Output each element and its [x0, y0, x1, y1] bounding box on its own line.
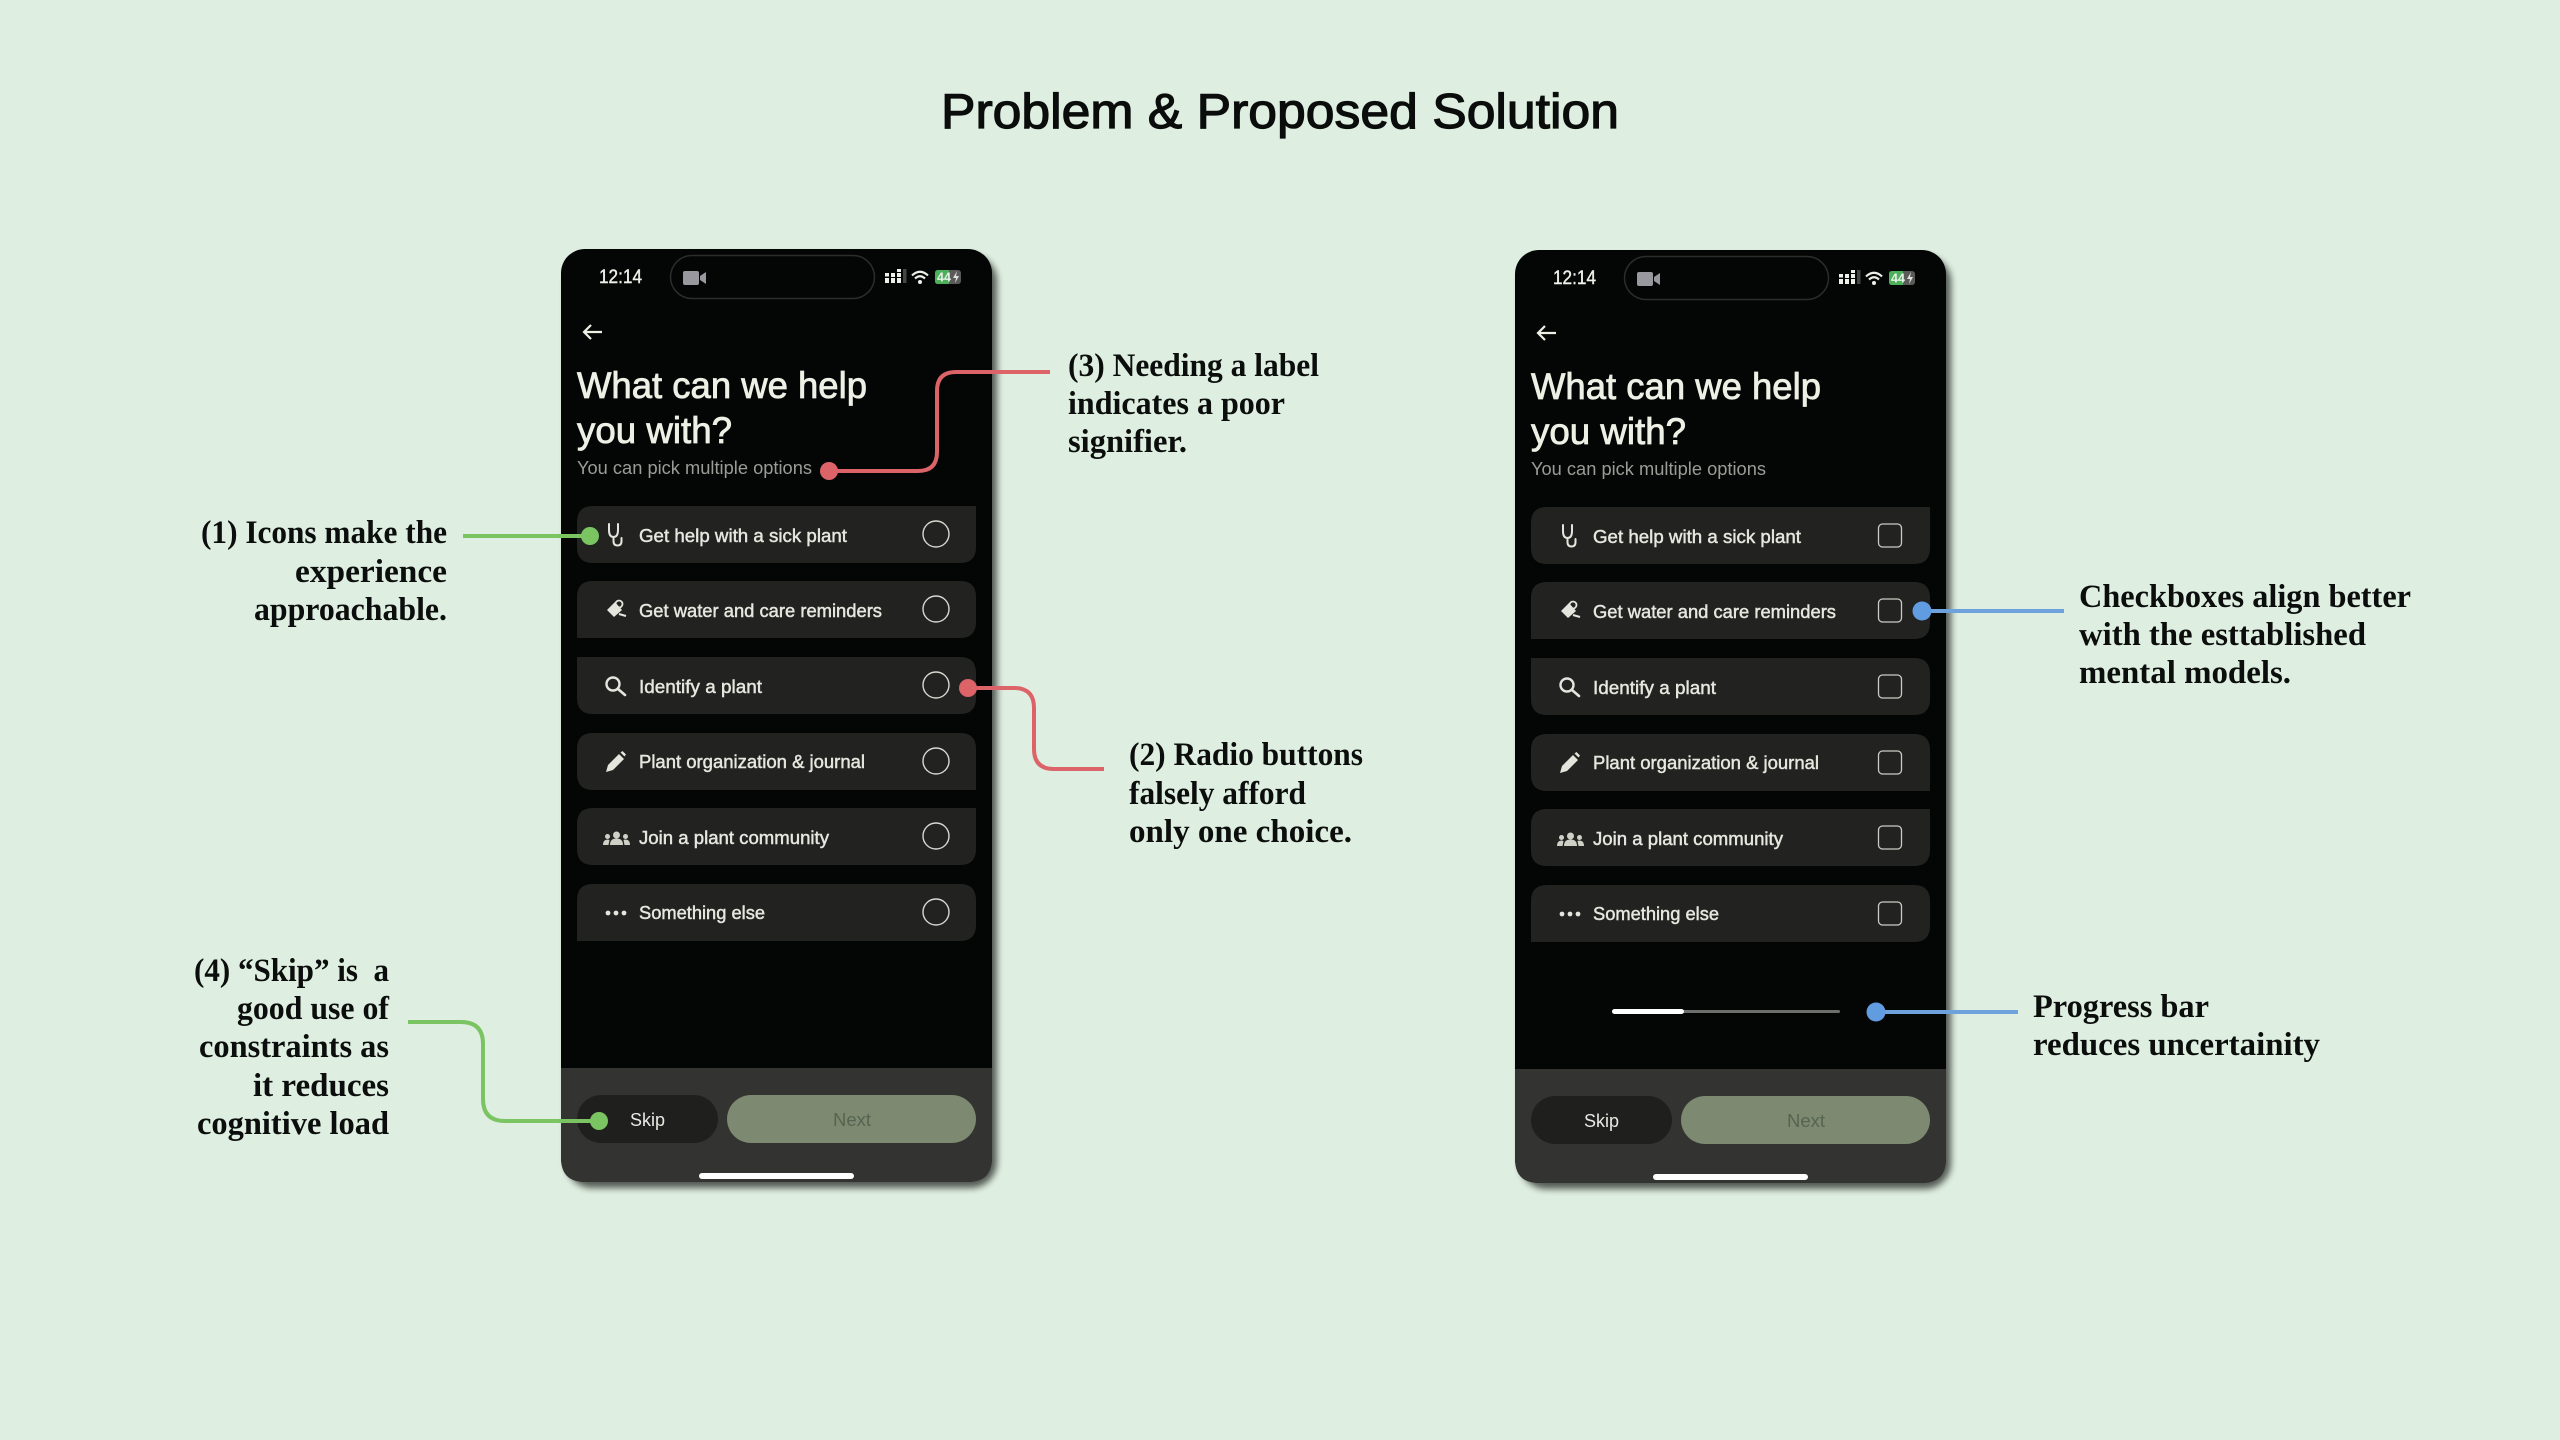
callout: progress bar: Progress bar — [2033, 989, 2209, 1025]
option: identify: Identify a plant — [1593, 678, 1716, 698]
heading — [1531, 366, 1821, 452]
heading — [577, 365, 867, 451]
option: sick plant — [577, 506, 976, 563]
connector: icons callout — [463, 527, 599, 545]
option: water reminders: Get water and care reminders — [639, 601, 882, 621]
footer area — [1515, 1069, 1946, 1183]
subheading: You can pick multiple options — [1531, 459, 1766, 479]
phone: proposed screen with checkboxes — [1515, 250, 1951, 1189]
heading: What can we help — [1531, 366, 1821, 407]
callout: radio buttons — [1129, 737, 1363, 850]
icon: people — [1557, 832, 1584, 846]
icon: pencil — [606, 751, 626, 772]
skip button — [1531, 1096, 1672, 1144]
status bar: 12:14 — [599, 267, 642, 288]
callout: skip: good use of — [237, 991, 390, 1027]
title: Problem & Proposed Solution — [941, 85, 1619, 139]
option: identify: Identify a plant — [639, 677, 762, 697]
icon: stethoscope — [1563, 525, 1576, 546]
connector: radio buttons callout — [959, 679, 1104, 769]
callout: skip: (4) “Skip” is a — [194, 953, 389, 989]
next button: Next — [833, 1109, 871, 1130]
icon: watering can — [1561, 602, 1580, 618]
status bar — [1553, 256, 1915, 300]
icon: people — [603, 832, 630, 845]
option: journal — [1531, 734, 1930, 791]
next button: Next — [1787, 1110, 1825, 1131]
phone shadow — [566, 255, 997, 1188]
callout: checkboxes: mental models. — [2079, 655, 2291, 691]
connector: checkboxes callout — [1912, 602, 2064, 620]
option: community: Join a plant community — [639, 828, 829, 848]
option: water reminders: Get water and care reminders — [1593, 602, 1836, 622]
callout: icons — [201, 515, 447, 628]
skip button: Skip — [1584, 1110, 1619, 1131]
back arrow — [584, 325, 602, 339]
phone body — [561, 249, 992, 1182]
phone: problem screen with radio buttons — [561, 249, 997, 1188]
callout: radio buttons: (2) Radio buttons — [1129, 737, 1363, 773]
option: identify — [577, 657, 976, 714]
option: journal: Plant organization & journal — [1593, 753, 1819, 773]
option: water reminders — [1531, 582, 1930, 639]
progress bar — [1612, 1009, 1840, 1014]
icon: dots — [606, 911, 626, 915]
option: something else: Something else — [639, 903, 765, 923]
callout: radio buttons: only one choice. — [1129, 814, 1352, 850]
option: sick plant — [1531, 507, 1930, 564]
option: community: Join a plant community — [1593, 829, 1783, 849]
icon: stethoscope — [609, 524, 622, 546]
callout: signifier — [1068, 348, 1319, 460]
home indicator — [699, 1173, 854, 1179]
connector: signifier callout — [820, 372, 1050, 480]
phone body — [1515, 250, 1946, 1183]
callout: checkboxes: with the esttablished — [2079, 617, 2366, 653]
home indicator — [1653, 1174, 1808, 1180]
callout: icons: experience — [295, 554, 447, 590]
option: something else — [1531, 885, 1930, 942]
icon: pencil — [1560, 752, 1580, 773]
status bar: 44 — [1891, 272, 1905, 286]
callout: signifier: (3) Needing a label — [1068, 348, 1319, 384]
footer area — [561, 1068, 992, 1182]
callout: skip: cognitive load — [197, 1106, 389, 1142]
heading: What can we help — [577, 365, 867, 406]
icon: watering can — [607, 600, 626, 617]
status bar: 44 — [937, 270, 951, 284]
next button — [727, 1095, 976, 1143]
next button — [1681, 1096, 1930, 1144]
callout: checkboxes: Checkboxes align better — [2079, 579, 2411, 615]
callout: skip: it reduces — [253, 1068, 389, 1104]
subheading: You can pick multiple options — [577, 458, 812, 478]
callout: progress bar — [2033, 989, 2320, 1063]
callout: skip: constraints as — [199, 1029, 389, 1065]
callout: signifier: signifier. — [1068, 424, 1187, 460]
connector: skip callout — [408, 1022, 608, 1130]
option: identify — [1531, 658, 1930, 715]
option: journal: Plant organization & journal — [639, 752, 865, 772]
skip button — [577, 1095, 718, 1143]
connector: progress bar callout — [1866, 1002, 2018, 1022]
option: something else — [577, 884, 976, 941]
status bar: 12:14 — [1553, 268, 1596, 289]
option: sick plant: Get help with a sick plant — [1593, 527, 1801, 547]
callout: icons: approachable. — [254, 592, 447, 628]
status bar — [599, 256, 961, 298]
icon: search — [1560, 678, 1579, 696]
back arrow — [1538, 326, 1556, 340]
option: water reminders — [577, 581, 976, 638]
skip button: Skip — [630, 1109, 665, 1130]
heading: you with? — [577, 410, 732, 451]
icon: search — [606, 678, 625, 695]
icon: dots — [1560, 912, 1580, 916]
heading: you with? — [1531, 411, 1686, 452]
option: community — [577, 808, 976, 865]
callout: radio buttons: falsely afford — [1129, 776, 1306, 812]
option: journal — [577, 733, 976, 790]
phone shadow — [1520, 256, 1951, 1189]
option: sick plant: Get help with a sick plant — [639, 526, 847, 546]
callout: signifier: indicates a poor — [1068, 386, 1285, 422]
callout: skip — [194, 953, 390, 1142]
callout: icons: (1) Icons make the — [201, 515, 447, 551]
callout: progress bar: reduces uncertainity — [2033, 1027, 2320, 1063]
option: something else: Something else — [1593, 904, 1719, 924]
callout: checkboxes — [2079, 579, 2411, 691]
option: community — [1531, 809, 1930, 866]
